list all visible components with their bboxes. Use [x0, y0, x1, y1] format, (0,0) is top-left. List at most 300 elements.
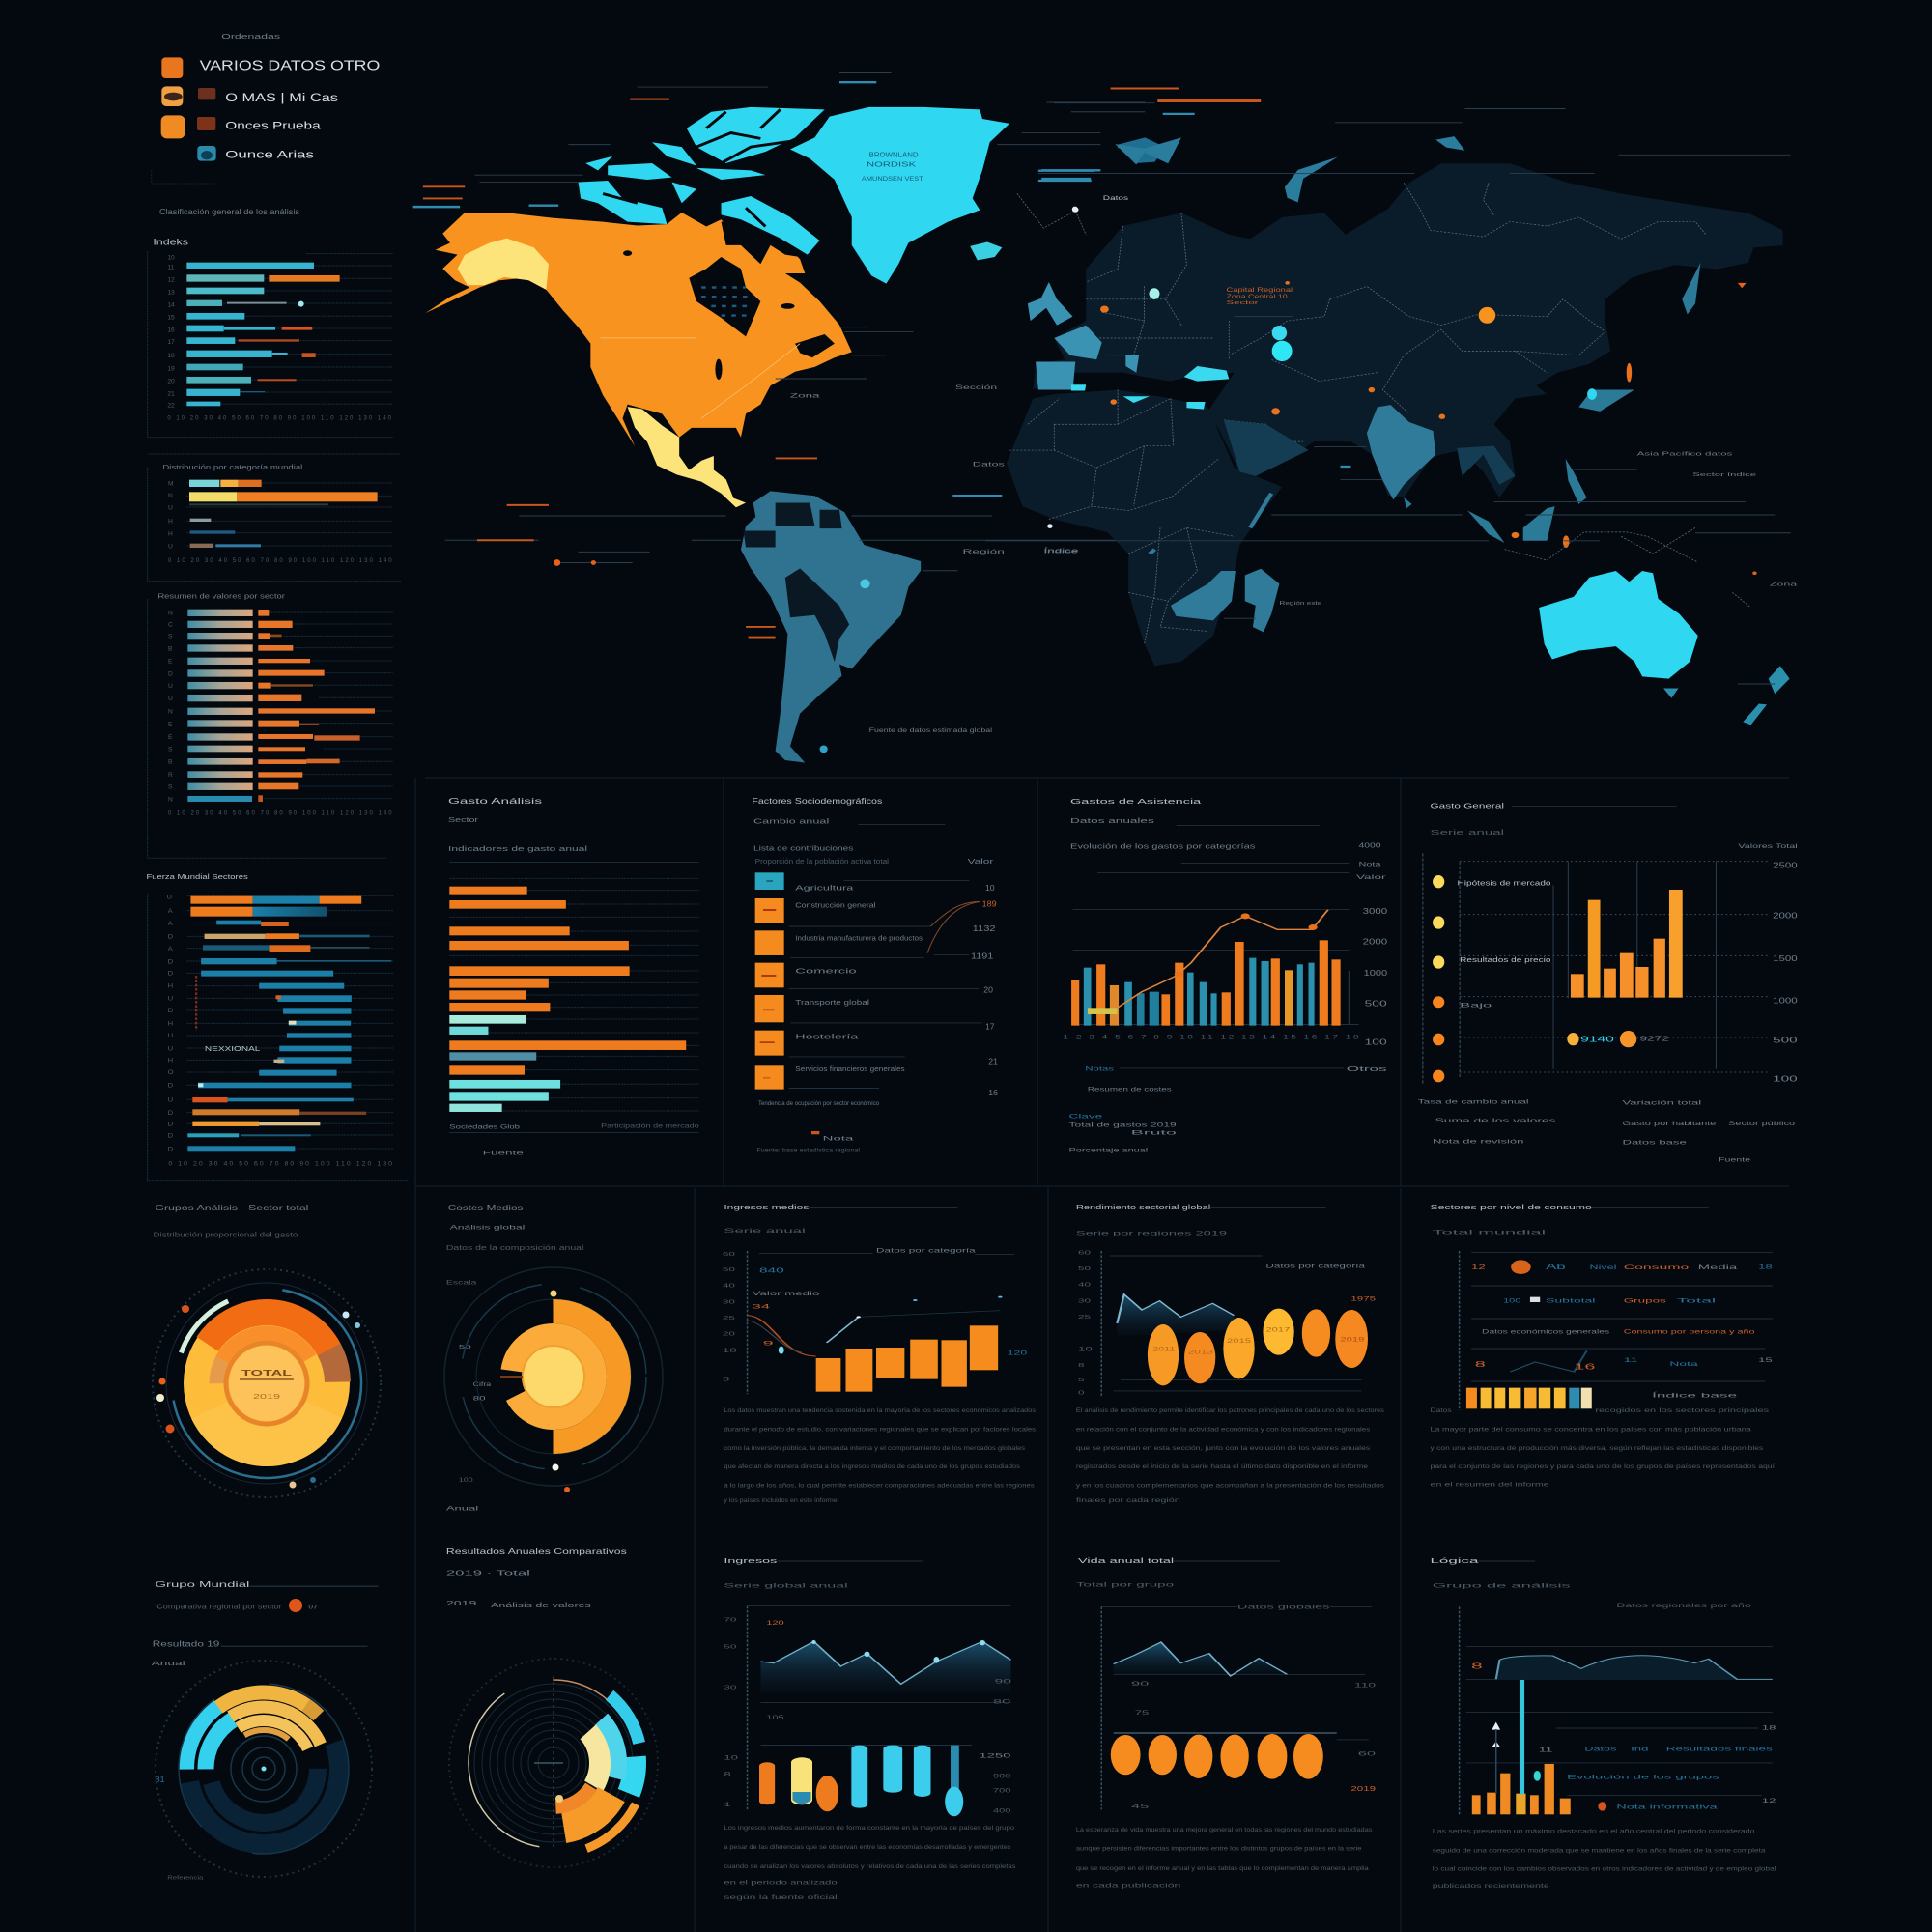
chart C axis labels: E — [168, 659, 173, 666]
donut heading: Grupos Análisis · Sector total — [155, 1203, 309, 1212]
combo axis labels: 2000 — [1363, 938, 1387, 947]
Australia — [1539, 571, 1698, 679]
chart E footer labels — [449, 1122, 699, 1156]
chart B axis labels: H — [168, 519, 173, 526]
area oval paragraph: en cada publicación — [1076, 1882, 1180, 1889]
radial chart heading: Grupo Mundial — [155, 1579, 250, 1589]
radial chart heading: Referencia — [167, 1875, 203, 1882]
chart D axis labels: U — [168, 1096, 173, 1103]
list labels: Agricultura — [795, 886, 854, 893]
orange curves — [927, 901, 980, 953]
block chart labels: 60 — [723, 1251, 735, 1257]
chart D axis labels: U — [168, 995, 173, 1002]
block chart curves — [748, 1296, 1003, 1356]
cyan bands — [186, 1691, 341, 1846]
combo heading: Datos anuales — [1070, 817, 1155, 825]
chart B axis labels: 0 10 20 30 40 50 60 70 80 90 100 110 120 130 140 — [168, 558, 392, 564]
panel: area and orange oval chart — [1076, 1557, 1377, 1889]
radial chart heading: 81 — [155, 1775, 165, 1784]
grid chart highlighted value — [1567, 1031, 1669, 1047]
combo axis labels: Nota — [1359, 861, 1381, 867]
grid chart labels: 2000 — [1773, 912, 1798, 921]
block chart labels: 25 — [723, 1315, 735, 1321]
striped chart paragraph: en el resumen del informe — [1431, 1481, 1549, 1488]
panel heading: Lista de contribuciones — [753, 844, 854, 853]
area oval labels: 110 — [1354, 1683, 1376, 1689]
list values: 16 — [988, 1088, 998, 1097]
combo axis labels: 100 — [1365, 1038, 1387, 1047]
chart D axis labels: H — [168, 982, 173, 990]
combo notes: Clave — [1069, 1112, 1103, 1120]
block chart paragraph: como la inversión pública, la demanda interna y el comportamiento de los mercados globales — [724, 1445, 1025, 1452]
map callout lines and labels: Índice — [1044, 546, 1079, 554]
Greenland label: BROWNLAND — [869, 151, 919, 159]
pill chart labels: 1250 — [979, 1752, 1010, 1759]
list values: 10 — [985, 883, 995, 893]
Greenland — [790, 107, 1009, 284]
pill chart labels: 90 — [994, 1679, 1012, 1685]
map callout lines and labels: Zona — [1770, 582, 1798, 587]
pill chart labels: 30 — [724, 1685, 736, 1690]
chart D axis labels: H — [168, 1020, 173, 1027]
donut base — [184, 1300, 350, 1466]
striped chart rows: Grupos — [1624, 1298, 1666, 1304]
striped chart rows: Nota — [1669, 1361, 1698, 1368]
panel: ring chart with orange and cyan sectors — [430, 1547, 677, 1887]
map callout lines and labels — [985, 100, 1798, 696]
grid chart footnotes: Suma de los valores — [1435, 1117, 1556, 1124]
Eurasia landmass — [1033, 163, 1782, 497]
radial inner rings — [179, 1684, 349, 1854]
chart D axis labels: D — [168, 1082, 173, 1089]
donut center label: 2019 — [253, 1394, 280, 1401]
chart E heading: Indicadores de gasto anual — [448, 846, 588, 853]
striped chart rows: Datos económicos generales — [1482, 1329, 1609, 1335]
tall bar heading: Datos regionales por año — [1616, 1603, 1751, 1609]
chart A axis labels: 10 — [167, 254, 175, 261]
chart A axis labels: 13 — [167, 289, 175, 296]
donut heading: Distribución proporcional del gasto — [154, 1232, 298, 1239]
combo trend line — [1088, 910, 1328, 1014]
pill chart labels: 70 — [724, 1617, 736, 1622]
chart E footer labels: Sociedades Glob — [449, 1123, 520, 1130]
oval chart labels: 2013 — [1188, 1350, 1213, 1355]
tall bar labels: Resultados finales — [1666, 1747, 1773, 1752]
chart D axis labels: H — [168, 1057, 173, 1064]
donut segments — [168, 1285, 365, 1482]
chart A heading: Clasificación general de los análisis — [159, 208, 299, 216]
combo axis labels — [1063, 841, 1387, 1073]
list footer: Fuente: base estadística regional — [756, 1148, 861, 1154]
striped chart rows: 11 — [1624, 1357, 1638, 1364]
Africa landmass — [1007, 390, 1282, 666]
grid chart footnotes: Sector público — [1728, 1120, 1795, 1127]
block chart labels: 50 — [723, 1266, 735, 1272]
donut outer arc — [156, 1273, 377, 1493]
legend labels: O MAS | Mi Cas — [225, 91, 338, 104]
block chart labels: 40 — [723, 1283, 735, 1289]
block chart paragraph: a lo largo de los años, lo cual permite establecer comparaciones adecuadas entre las regiones — [724, 1482, 1035, 1489]
area oval labels: 75 — [1135, 1710, 1150, 1717]
chart A axis labels: 17 — [167, 339, 175, 346]
chart A axis labels: 18 — [167, 353, 175, 359]
cyan and cream sectors — [430, 1639, 677, 1887]
chart A axis labels: 20 — [167, 379, 175, 385]
half donut heading — [446, 1203, 584, 1513]
Asia and Indonesia network lines — [1017, 193, 1751, 608]
half donut heading: 100 — [459, 1477, 473, 1484]
pill chart labels: 400 — [993, 1808, 1011, 1814]
block chart heading: Serie anual — [724, 1228, 806, 1235]
oval chart paragraph: en relación con el conjunto de la actividad económica y con los indicadores regionales — [1076, 1426, 1370, 1433]
chart E bars — [449, 887, 686, 1112]
oval chart labels — [1078, 1250, 1365, 1395]
list footer — [756, 1100, 879, 1154]
bar chart B: stacked bars — [148, 454, 401, 582]
chart C axis labels: N — [168, 796, 173, 803]
area oval area chart — [1114, 1642, 1287, 1676]
pill chart area — [760, 1641, 1010, 1693]
radial chart heading: Comparativa regional por sector — [156, 1604, 283, 1611]
grid chart footnotes: Tasa de cambio anual — [1418, 1097, 1529, 1105]
tall bar curve — [1496, 1656, 1773, 1679]
pill chart paragraph: en el periodo analizado — [724, 1879, 838, 1886]
block chart paragraph: y los países incluidos en este informe — [724, 1497, 838, 1504]
area oval heading: Vida anual total — [1078, 1557, 1174, 1565]
tall bar heading — [1431, 1557, 1773, 1795]
area oval paragraph — [1076, 1827, 1373, 1889]
pill chart heading: Ingresos — [724, 1557, 777, 1565]
oval chart heading: Rendimiento sectorial global — [1076, 1204, 1210, 1211]
block chart labels: 34 — [753, 1303, 770, 1310]
grid chart labels: 2500 — [1773, 862, 1798, 870]
combo notes: Resumen de costes — [1088, 1085, 1172, 1093]
pill chart labels: 120 — [766, 1620, 784, 1627]
block chart labels: Valor medio — [753, 1291, 819, 1297]
donut accent arc and dots — [151, 1267, 383, 1499]
chart D axis labels: U — [168, 1045, 173, 1052]
map callout lines and labels: Datos — [973, 462, 1005, 469]
oval chart labels: 8 — [1078, 1362, 1085, 1368]
striped chart rows: Nivel — [1590, 1264, 1616, 1271]
chart D axis labels: D — [168, 1121, 173, 1127]
oval chart labels: 50 — [1078, 1265, 1091, 1271]
pill chart labels: 1 — [724, 1802, 731, 1808]
chart D axis labels: U — [168, 1032, 173, 1039]
striped chart rows: 100 — [1503, 1298, 1521, 1304]
block chart heading: Datos por categoría — [876, 1247, 976, 1254]
chart A axis labels: 12 — [167, 277, 175, 284]
striped chart heading: Total mundial — [1433, 1229, 1546, 1236]
chart D axis labels: D — [168, 958, 173, 965]
oval chart paragraph: finales por cada región — [1076, 1497, 1180, 1504]
area oval labels: 90 — [1131, 1681, 1150, 1688]
radial chart heading — [152, 1579, 379, 1882]
half donut heading: Análisis global — [450, 1224, 525, 1232]
South America dark regions — [743, 502, 849, 662]
list footer: Nota — [823, 1136, 854, 1143]
pill chart labels: 8 — [724, 1772, 731, 1777]
pill chart paragraph: Los ingresos medios aumentaron de forma constante en la mayoría de países del grupo — [724, 1825, 1014, 1832]
chart D axis labels: D — [168, 1132, 173, 1139]
grid chart bars — [1571, 890, 1683, 998]
oval chart paragraph — [1076, 1407, 1384, 1504]
area oval labels: 2019 — [1350, 1785, 1376, 1793]
Africa highlights and Madagascar — [1171, 571, 1236, 620]
pill chart paragraph: cuando se analizan los valores absolutos y relativos de cada una de las series completas — [724, 1863, 1016, 1870]
tall bar labels: 12 — [1762, 1798, 1776, 1804]
pill chart labels: 10 — [724, 1755, 738, 1761]
panel: striped row chart — [1431, 1204, 1776, 1488]
panel: cyan and yellow radial chart — [152, 1579, 379, 1882]
half donut heading: Cifra — [473, 1382, 492, 1388]
chart C axis labels: S — [168, 634, 173, 640]
chart A axis labels — [167, 254, 392, 421]
country borders — [1009, 183, 1706, 644]
chart E footer labels: Participación de mercado — [601, 1122, 699, 1129]
chart D axis labels: U — [167, 894, 172, 901]
bar chart D: blue and orange bands — [146, 872, 409, 1181]
striped chart rows: Ab — [1546, 1263, 1566, 1271]
chart C axis labels: U — [168, 683, 173, 690]
Central Asia orange label: Zona Central 10 — [1227, 294, 1288, 300]
grid chart labels: 100 — [1773, 1074, 1798, 1084]
bar chart A: cyan horizontal bars — [148, 208, 393, 438]
chart D axis labels: O — [168, 1068, 174, 1076]
Greenland label — [862, 151, 923, 183]
ring chart heading: 2019 · Total — [446, 1570, 531, 1577]
list labels — [795, 886, 923, 1073]
list labels: Construcción general — [795, 902, 876, 909]
grid chart labels: Hipótesis de mercado — [1458, 879, 1551, 888]
list labels: Hostelería — [795, 1035, 859, 1041]
combo notes: Porcentaje anual — [1069, 1146, 1148, 1153]
oval chart paragraph: y en los cuadros complementarios que acompañan a la presentación de los resultados — [1076, 1482, 1384, 1489]
oval chart labels: 2017 — [1265, 1327, 1291, 1333]
half donut heading: 50 — [459, 1345, 471, 1350]
bar chart C: diverging bars — [148, 591, 393, 858]
oval chart labels: 60 — [1078, 1250, 1091, 1255]
oval chart paragraph: El análisis de rendimiento permite identificar los patrones principales de cada uno de los sectores — [1076, 1407, 1384, 1414]
chart C axis labels: S — [168, 746, 173, 753]
legend icons — [161, 57, 216, 161]
block chart labels: 10 — [723, 1348, 737, 1354]
chart C heading: Resumen de valores por sector — [157, 591, 286, 600]
panel: combo bar and line chart — [1063, 798, 1387, 1153]
map callout lines and labels: Sector índice — [1692, 471, 1757, 478]
tall bar paragraph — [1433, 1828, 1776, 1889]
half donut heading: Costes Medios — [448, 1203, 524, 1212]
chart D axis labels: A — [168, 907, 173, 915]
Iceland — [970, 242, 1002, 260]
chart D axis labels: D — [168, 970, 173, 977]
panel heading: Valor — [968, 857, 994, 866]
combo notes: Notas — [1085, 1065, 1114, 1072]
chart B axis labels: U — [168, 505, 173, 512]
chart E heading: Sector — [448, 817, 479, 824]
pill chart labels: 105 — [766, 1715, 784, 1721]
combo axis labels: 500 — [1365, 1000, 1387, 1009]
legend labels: VARIOS DATOS OTRO — [200, 58, 380, 73]
Alaska highlight — [458, 239, 549, 290]
chart D heading: Fuerza Mundial Sectores — [146, 872, 248, 881]
map callout lines and labels: Asia Pacífico datos — [1637, 451, 1734, 457]
list values — [971, 883, 998, 1097]
Central Asia orange label — [1227, 287, 1293, 306]
half donut heading: 80 — [473, 1396, 486, 1403]
oval chart labels: 25 — [1078, 1314, 1091, 1320]
chart D axis labels — [167, 894, 392, 1167]
list values: 17 — [985, 1022, 995, 1032]
highlighted Europe and Asia countries — [1028, 282, 1139, 390]
list values: 20 — [983, 984, 993, 994]
map callout lines and labels: Fuente de datos estimada global — [869, 727, 992, 734]
tall bar labels: 18 — [1762, 1725, 1776, 1731]
list icons — [755, 872, 784, 1090]
chart B axis labels: M — [168, 481, 174, 488]
legend heading: Ordenadas — [221, 32, 281, 41]
block chart paragraph: que afectan de manera directa a los ingresos medios de cada uno de los grupos estudiados — [724, 1463, 1020, 1470]
list footer: Tendencia de ocupación por sector económico — [758, 1100, 879, 1107]
chart C axis labels: B — [168, 645, 173, 652]
grid chart labels: 1000 — [1773, 996, 1798, 1006]
pill chart labels: 900 — [993, 1774, 1011, 1779]
striped chart heading: Sectores por nivel de consumo — [1431, 1204, 1592, 1211]
chart A axis labels: 16 — [167, 327, 175, 333]
grid chart labels: Bajo — [1460, 1002, 1492, 1009]
Greenland label: NORDISK — [867, 160, 916, 168]
half donut heading: Escala — [446, 1280, 478, 1287]
panel: striped row chart: Índice base — [1652, 1392, 1738, 1399]
tall bar labels: Ind — [1631, 1747, 1649, 1752]
grid chart heading — [1431, 802, 1798, 850]
oval chart labels: 2015 — [1227, 1338, 1251, 1345]
tall bar markers: 8 — [1471, 1662, 1483, 1670]
pill chart heading: Serie global anual — [724, 1582, 848, 1589]
chart C axis labels: R — [168, 772, 173, 779]
block chart bars — [816, 1325, 998, 1392]
half donut center — [523, 1346, 584, 1407]
chart A axis labels: 15 — [167, 315, 175, 322]
tall bar heading: Lógica — [1431, 1557, 1478, 1565]
block chart heading: Ingresos medios — [724, 1204, 809, 1211]
panel: bar chart E orange ranking — [449, 863, 699, 1156]
ring chart heading: Resultados Anuales Comparativos — [446, 1547, 627, 1556]
striped chart rows: 16 — [1574, 1362, 1595, 1371]
chart C axis labels: E — [168, 734, 173, 741]
grid chart labels: 1500 — [1773, 954, 1798, 963]
chart C axis labels: N — [168, 611, 173, 617]
chart A axis labels: 22 — [167, 403, 175, 410]
map callout lines and labels: Datos — [1103, 196, 1129, 202]
orange markers — [1100, 281, 1632, 548]
tall bar labels: Nota informativa — [1616, 1804, 1718, 1810]
area oval ovals — [1111, 1734, 1323, 1779]
tall bar markers — [1471, 1662, 1606, 1811]
radial chart heading: Anual — [152, 1662, 185, 1667]
striped chart rows: Consumo por persona y año — [1624, 1329, 1755, 1335]
combo axis labels: 3000 — [1363, 908, 1387, 916]
grid chart footnotes: Gasto por habitante — [1622, 1120, 1717, 1127]
grid chart highlighted value: 9140 — [1580, 1036, 1614, 1044]
map callout lines and labels: Región — [963, 549, 1006, 555]
chart A axis labels: 0 10 20 30 40 50 60 70 80 90 100 110 120 130 140 — [167, 415, 392, 421]
striped chart rows: Media — [1698, 1264, 1738, 1271]
Turkey and Caspian highlights — [1071, 366, 1229, 410]
oval chart labels: 2011 — [1152, 1347, 1176, 1352]
striped chart rows: Consumo — [1624, 1264, 1690, 1271]
grid chart footnotes: Nota de revisión — [1433, 1137, 1524, 1145]
block chart paragraph: Los datos muestran una tendencia sostenida en la mayoría de los sectores económicos analizados — [724, 1407, 1036, 1414]
oval chart labels: 40 — [1078, 1282, 1091, 1288]
combo notes: Bruto — [1131, 1128, 1177, 1136]
pill chart labels: 80 — [993, 1699, 1011, 1705]
combo bars — [1071, 940, 1341, 1026]
tall bar heading: Grupo de análisis — [1433, 1582, 1571, 1589]
oval chart heading: 1975 — [1350, 1295, 1376, 1302]
grid chart markers — [1433, 875, 1444, 1082]
chart D axis labels: D — [168, 1109, 173, 1117]
chart C axis labels: U — [168, 696, 173, 702]
pill chart paragraph — [724, 1825, 1016, 1901]
block chart paragraph: durante el periodo de estudio, con variaciones regionales que se explican por factores locales — [724, 1426, 1036, 1433]
grid chart footnotes: Variación total — [1622, 1098, 1701, 1106]
grid chart highlighted value: 9272 — [1639, 1035, 1669, 1043]
oval chart heading — [1076, 1204, 1376, 1391]
grid chart heading: Gasto General — [1431, 802, 1504, 810]
grid chart heading: Valores Total — [1738, 842, 1798, 850]
combo axis labels: 4000 — [1359, 841, 1380, 850]
area oval paragraph: aunque persisten diferencias importantes entre los distintos grupos de países en la serie — [1076, 1845, 1361, 1852]
combo axis labels: Valor — [1356, 873, 1386, 881]
chart D inline label: NEXXIONAL — [205, 1044, 261, 1053]
block chart labels: 20 — [723, 1331, 735, 1337]
list values: 1132 — [973, 923, 996, 933]
grid chart footnotes — [1418, 1097, 1795, 1163]
map callout lines and labels: Zona — [790, 393, 820, 399]
pill chart heading — [724, 1557, 1010, 1746]
combo heading — [1070, 798, 1256, 850]
chart C right bars — [258, 610, 375, 802]
pill chart labels: 50 — [724, 1644, 736, 1650]
donut center label — [240, 1369, 294, 1401]
oval chart heading: Serie por regiones 2019 — [1076, 1230, 1227, 1236]
oval chart labels: 0 — [1078, 1390, 1085, 1395]
area oval heading — [1076, 1557, 1372, 1740]
chart C axis labels — [168, 611, 392, 816]
ring chart heading: 2019 — [446, 1600, 477, 1607]
oval chart labels: 2019 — [1340, 1337, 1365, 1343]
list labels: Servicios financieros generales — [795, 1066, 905, 1073]
striped chart rows — [1471, 1260, 1773, 1372]
combo heading: Evolución de los gastos por categorías — [1070, 842, 1256, 850]
combo axis labels: Otros — [1347, 1065, 1387, 1073]
legend labels: Ounce Arias — [225, 149, 314, 160]
legend — [152, 32, 380, 184]
chart A bars — [186, 263, 340, 406]
half donut outer segment — [489, 1312, 618, 1441]
chart A heading: Indeks — [153, 237, 188, 246]
chart C left bars — [187, 610, 253, 802]
chart A heading — [153, 208, 299, 246]
panel heading: Cambio anual — [753, 817, 830, 826]
grid chart heading: Serie anual — [1431, 829, 1504, 837]
legend labels — [200, 58, 380, 160]
area oval labels: 60 — [1358, 1751, 1377, 1757]
combo axis labels: 1000 — [1364, 970, 1387, 978]
chart D bars — [187, 896, 391, 1151]
chart C axis labels: S — [168, 784, 173, 791]
